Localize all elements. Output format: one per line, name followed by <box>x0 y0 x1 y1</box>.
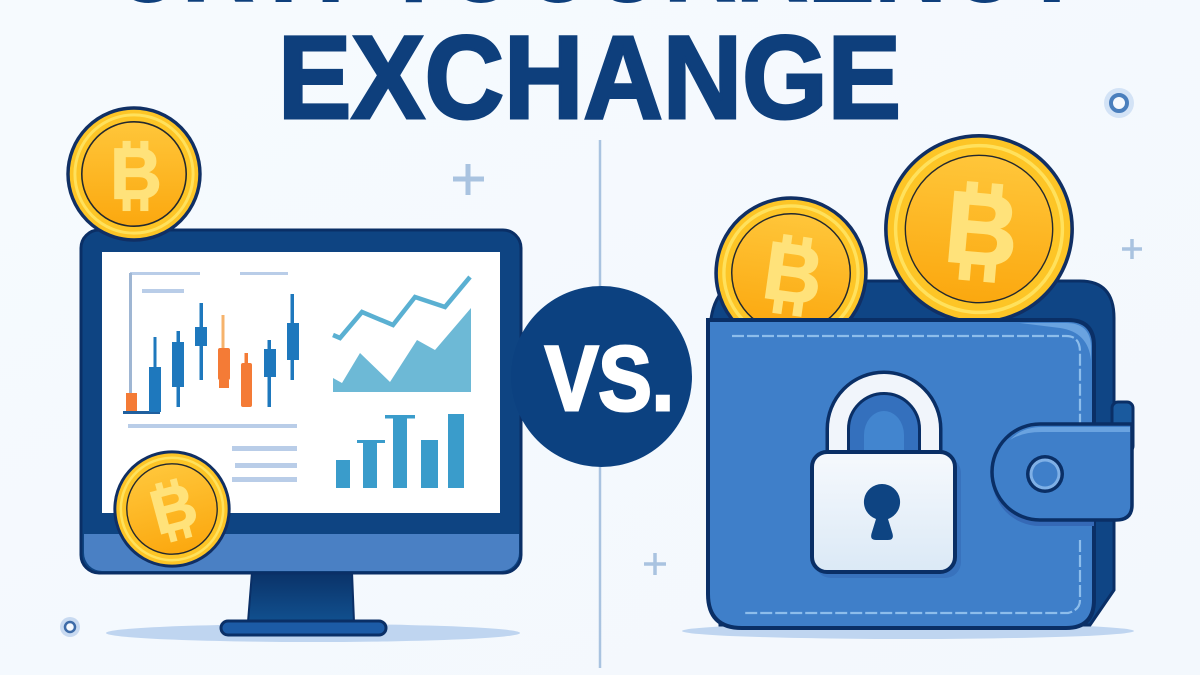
line chart <box>333 277 470 338</box>
VS label: VS. <box>545 328 674 430</box>
clasp shadow <box>992 478 1094 526</box>
padlock shackle <box>838 383 930 458</box>
blue candles <box>123 294 299 414</box>
wallet back <box>710 281 1114 625</box>
wallet top highlight <box>1020 323 1091 360</box>
decoration: ring bottom left <box>60 617 80 637</box>
monitor base <box>221 621 386 635</box>
monitor frame <box>81 230 521 573</box>
decoration: ring top right <box>1104 88 1134 118</box>
clasp highlight <box>1010 427 1130 440</box>
clasp strap <box>992 424 1132 520</box>
padlock <box>812 383 961 578</box>
keyhole <box>864 484 900 540</box>
clasp tab behind <box>1112 402 1133 452</box>
bitcoin symbol: B <box>110 135 162 215</box>
padlock shadow <box>815 457 961 578</box>
bitcoin symbol: B <box>143 470 205 548</box>
coin: large in wallet <box>878 128 1080 330</box>
padlock body <box>812 452 955 572</box>
bitcoin symbol: B <box>940 169 1023 289</box>
axis lines <box>128 272 297 482</box>
clasp button <box>1026 455 1064 493</box>
candlestick chart <box>123 272 299 482</box>
wallet shadow <box>682 623 1134 639</box>
centre divider <box>599 140 601 668</box>
coin: small in wallet <box>706 188 876 358</box>
VS badge <box>511 286 692 467</box>
wallet stitching <box>732 336 1080 613</box>
wallet front <box>708 320 1094 628</box>
area chart <box>333 308 471 392</box>
monitor shadow <box>106 624 520 642</box>
screen <box>102 252 500 513</box>
title <box>110 0 1085 144</box>
coin: on screen <box>102 439 242 579</box>
bitcoin symbol: B <box>758 225 829 323</box>
panel: wallet <box>682 128 1134 639</box>
decoration: plus signs <box>453 164 1142 575</box>
bar chart <box>336 414 464 488</box>
monitor stand <box>248 572 354 622</box>
orange candles <box>126 315 252 412</box>
monitor chin <box>84 534 519 571</box>
panel: exchange monitor <box>81 230 521 642</box>
title line 2: EXCHANGE <box>278 12 901 144</box>
coin: top left <box>68 108 200 240</box>
